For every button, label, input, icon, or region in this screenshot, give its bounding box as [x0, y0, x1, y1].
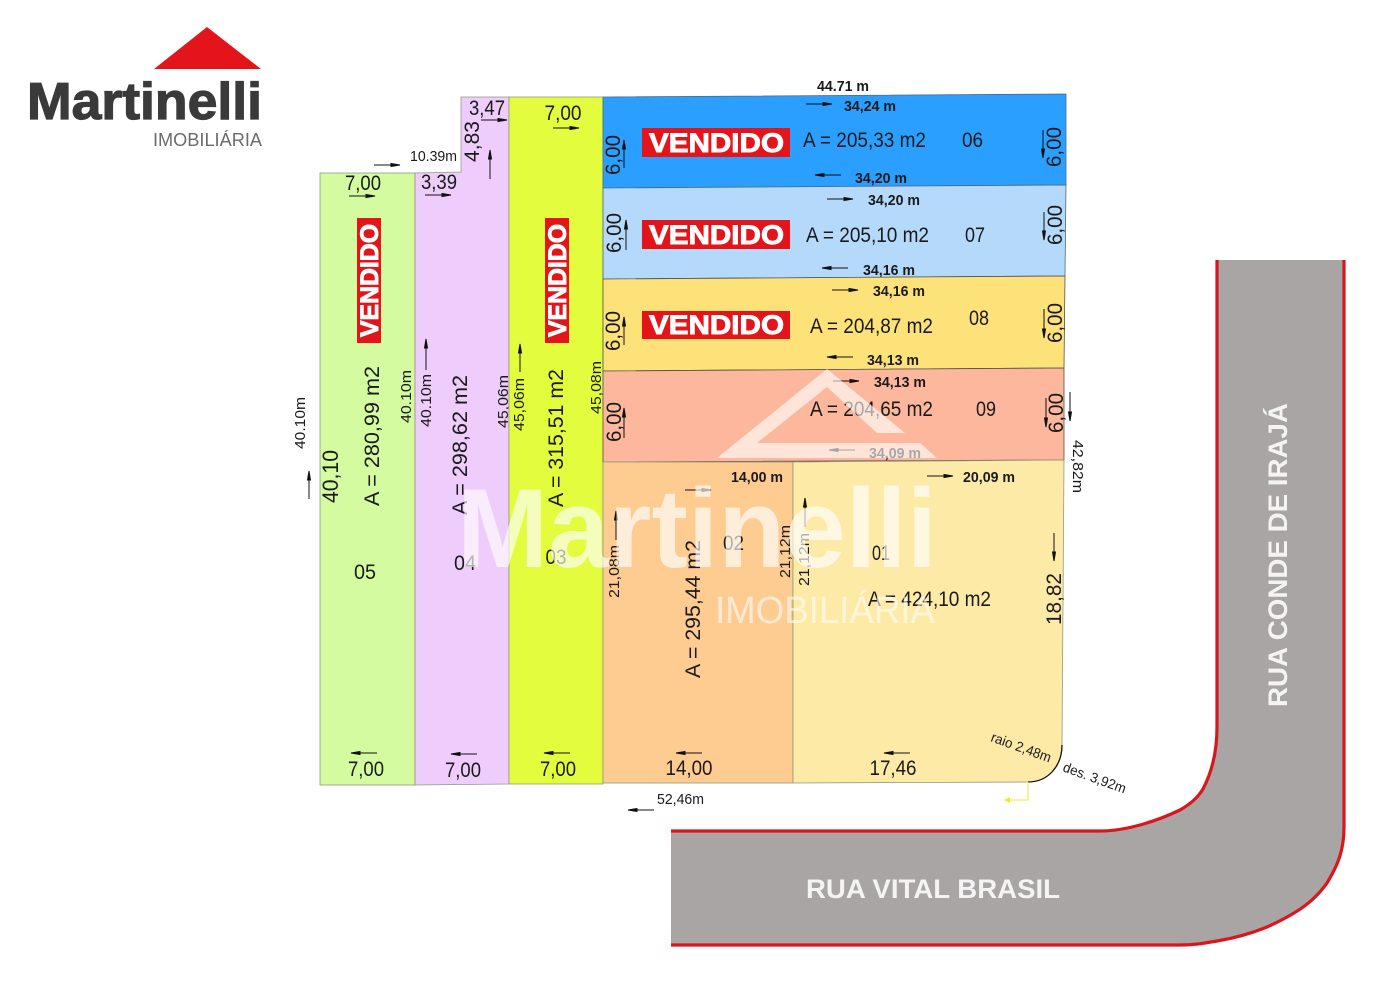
right depth: 6,00	[1044, 205, 1067, 245]
right depth: 6,00	[1043, 127, 1066, 167]
left side length: 45,06m	[511, 378, 528, 431]
right depth: 6,00	[1044, 303, 1067, 343]
panel: lot 01	[793, 460, 1066, 783]
top step width: 3,47	[469, 97, 505, 120]
arrow	[1042, 130, 1044, 158]
sold badge: VENDIDO	[544, 224, 572, 337]
lot number: 02	[723, 532, 744, 555]
bottom length: 34,09 m	[869, 446, 921, 462]
lot number: 05	[354, 561, 376, 584]
left side length: 21,08m	[606, 545, 623, 598]
arrow	[832, 288, 858, 292]
lot number: 06	[962, 129, 983, 152]
arrow	[676, 752, 702, 754]
overall dimension: 10.39m: 10.39m	[410, 148, 457, 165]
panel: lot 05	[318, 172, 415, 785]
left side length: 40.10m	[418, 374, 435, 427]
panel: lot 09	[603, 368, 1068, 462]
radius label: raio 2,48m	[989, 729, 1054, 765]
arrow	[351, 752, 377, 754]
arrow	[1044, 398, 1048, 427]
left depth: 6,00	[603, 213, 626, 253]
arrow	[827, 356, 853, 358]
icon: red roof	[154, 27, 261, 69]
top width: 7,00	[345, 172, 381, 195]
bottom length: 34,13 m	[867, 353, 919, 369]
left depth: 6,00	[603, 402, 626, 442]
arrow	[806, 102, 832, 106]
bottom width: 7,00	[445, 759, 481, 782]
bottom width: 17,46	[870, 757, 916, 780]
lot number: 09	[976, 398, 996, 421]
bottom length: 34,16 m	[863, 263, 915, 279]
right side length: 21,12m	[777, 525, 794, 578]
bottom width: 7,00	[348, 758, 384, 781]
lot area label: A = 298,62 m2	[449, 375, 472, 515]
lot area label: A = 315,51 m2	[545, 369, 568, 507]
arrow	[518, 344, 522, 372]
panel: lot 08	[602, 276, 1067, 371]
arrow	[829, 448, 855, 452]
sold badge: VENDIDO	[649, 310, 784, 340]
bottom width: 14,00	[666, 757, 712, 780]
arrow	[349, 194, 375, 198]
arrow	[451, 752, 477, 756]
top length: 34,20 m	[868, 193, 920, 209]
arrow	[624, 220, 628, 250]
overall dimension: 40.10m	[292, 397, 310, 499]
top width: 3,39	[421, 171, 457, 194]
arrow	[804, 498, 806, 527]
panel: lot 02	[603, 462, 794, 783]
lot 07 area	[603, 185, 1066, 279]
top length: 14,00 m	[731, 470, 783, 486]
arrow	[1042, 212, 1046, 240]
overall dimension: 52,46m	[628, 791, 704, 812]
watermark wordmark: Martinelli	[457, 466, 937, 591]
top length: 34,24 m	[844, 99, 896, 115]
lot 05 area	[320, 173, 415, 785]
road: Rua Vital Brasil and Rua Conde de Irajá	[671, 260, 1344, 945]
arrow	[822, 266, 848, 270]
left depth: 6,00	[602, 135, 625, 175]
lot number: 07	[965, 224, 985, 247]
left depth: 6,00	[602, 311, 625, 351]
overall dimension: 40.10m: 40.10m	[292, 397, 309, 449]
panel: lot 06	[602, 94, 1066, 188]
arrow	[614, 511, 618, 540]
arrow	[1052, 533, 1056, 561]
bottom length: 34,20 m	[855, 171, 907, 187]
left side length: 21,12m	[796, 533, 813, 586]
lot 06 area	[603, 94, 1066, 188]
lot 01 area	[793, 460, 1064, 783]
lot number: 04	[454, 552, 476, 575]
arrow	[827, 198, 853, 200]
overall dimension: 52,46m: 52,46m	[657, 791, 704, 808]
lot number: 03	[546, 546, 566, 569]
arrow	[481, 118, 507, 122]
yellow corner marker	[1004, 782, 1028, 803]
lot area label: A = 204,87 m2	[810, 315, 933, 338]
watermark: Martinelli Imobiliária	[457, 369, 937, 632]
arrow	[927, 474, 953, 478]
top length: 34,13 m	[874, 375, 926, 391]
lot 02 area	[603, 462, 793, 783]
overall dimension: 10.39m	[374, 148, 457, 166]
arrow	[1042, 309, 1046, 338]
lot number: 01	[872, 542, 890, 565]
lot area label: A = 295,44 m2	[682, 540, 705, 678]
arrow	[622, 408, 626, 438]
panel: lot 07	[603, 185, 1067, 279]
sold badge: VENDIDO	[356, 224, 384, 337]
lot 08 area	[603, 276, 1065, 371]
arrow	[685, 488, 711, 492]
lot 04 area	[415, 97, 509, 785]
lot area label: A = 280,99 m2	[361, 366, 384, 506]
right side length: 18,82	[1043, 573, 1066, 625]
arrow	[424, 339, 428, 370]
logo wordmark: Martinelli	[27, 73, 262, 131]
top length: 20,09 m	[963, 470, 1015, 486]
arrow	[488, 150, 492, 179]
overall dimension: 44.71 m: 44.71 m	[817, 79, 869, 95]
panel: lot 03	[509, 97, 605, 784]
step height: 4,83	[461, 121, 484, 162]
rounded corner	[1028, 745, 1062, 782]
sold badge: VENDIDO	[649, 128, 784, 158]
street name: Rua Conde de Irajá: RUA CONDE DE IRAJÁ	[1262, 403, 1293, 707]
street name: Rua Vital Brasil: RUA VITAL BRASIL	[806, 874, 1060, 904]
top width: 7,00	[544, 102, 582, 125]
lot area label: A = 204,65 m2	[810, 398, 933, 421]
arrow	[815, 174, 841, 176]
logo subtitle: IMOBILIÁRIA	[153, 130, 262, 150]
overall dimension: 42,82m	[1068, 392, 1086, 493]
right side length: 40.10m	[398, 370, 415, 423]
road surface	[671, 260, 1344, 945]
right side length: 45,06m	[495, 375, 512, 428]
sold badge: VENDIDO	[649, 220, 784, 250]
logo: Martinelli Imobiliária	[27, 27, 262, 150]
right side length: 45,08m	[588, 361, 605, 414]
watermark roof	[717, 369, 937, 458]
lot area label: A = 424,10 m2	[868, 588, 991, 611]
arrow	[622, 140, 626, 168]
lot area label: A = 205,10 m2	[806, 224, 929, 247]
lot 03 area	[509, 97, 603, 784]
watermark subtitle: IMOBILIÁRIA	[715, 589, 936, 632]
road outer curb	[671, 260, 1344, 945]
corner development label: des. 3,92m	[1061, 759, 1128, 796]
arrow	[553, 126, 579, 130]
arrow	[833, 380, 859, 382]
lot 09 area	[603, 368, 1064, 462]
lot area label: A = 205,33 m2	[803, 129, 926, 152]
lot number: 08	[969, 307, 989, 330]
bottom width: 7,00	[540, 758, 576, 781]
arrow	[544, 752, 570, 754]
arrow	[622, 317, 626, 345]
panel: lot 04	[415, 97, 512, 785]
road inner curb	[671, 260, 1217, 831]
arrow	[884, 752, 910, 754]
side length: 40,10	[318, 450, 343, 503]
top length: 34,16 m	[873, 284, 925, 300]
right depth: 6,00	[1045, 393, 1068, 433]
arrow	[425, 194, 451, 196]
overall dimension: 42,82m: 42,82m	[1069, 440, 1086, 493]
